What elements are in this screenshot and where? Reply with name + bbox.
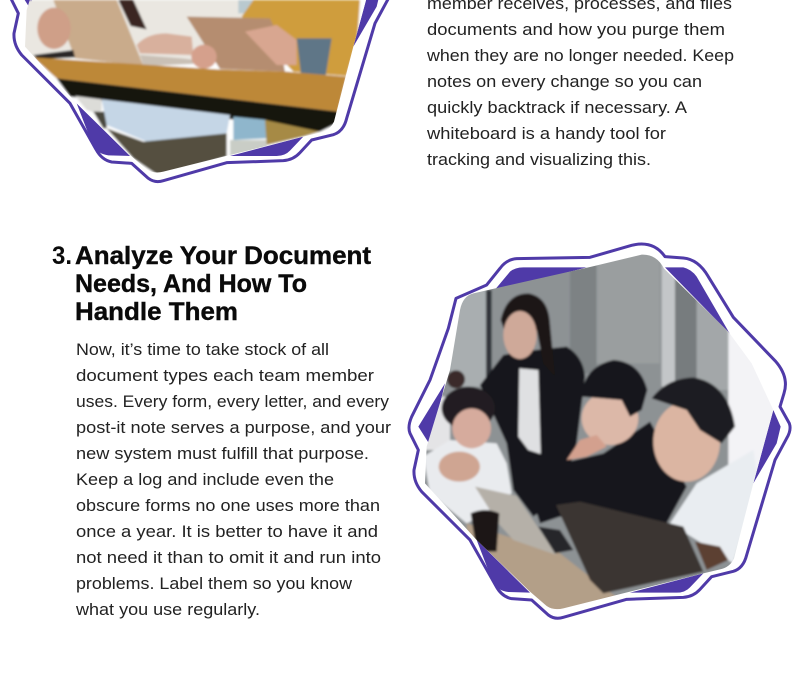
photo frame: team at table with laptop and tablet [9, 0, 390, 182]
heading: step 3: Needs, And How To [75, 270, 307, 298]
photo frame: four colleagues around laptops [409, 244, 790, 618]
middle man [532, 422, 687, 523]
text block: step 2 continued: whiteboard is a handy tool for [426, 124, 666, 143]
table and laptops [466, 524, 615, 609]
photo [420, 250, 780, 613]
text block: step 3 body: new system must fulfill that purpose. [76, 444, 369, 463]
text block: step 3 body: what you use regularly. [75, 600, 260, 619]
text block: step 3 body: not need it than to omit it and run into [76, 548, 381, 567]
outline ring [9, 0, 390, 182]
photo [20, 0, 367, 180]
text block: step 3 body: problems. Label them so you know [76, 574, 353, 593]
purple accents [18, 0, 381, 156]
outline ring [409, 244, 790, 618]
text block: step 2 continued: quickly backtrack if necessary. A [427, 98, 688, 117]
text block: step 2 continued: documents and how you purge them [427, 20, 725, 39]
text block: step 2 continued: tracking and visualizing this. [427, 150, 651, 169]
text block: step 2 continued: notes on every change so you can [427, 72, 702, 91]
heading: step 3 [52, 242, 372, 326]
text block: step 3 body [75, 340, 391, 619]
seated woman [423, 440, 512, 523]
text block: step 3 body: document types each team member [76, 366, 374, 385]
text block: step 2 continued [426, 0, 734, 169]
right man [670, 450, 758, 563]
text block: step 2 continued: when they are no longer needed. Keep [426, 46, 734, 65]
text block: step 3 body: Now, it’s time to take stock of all [76, 340, 329, 359]
text block: step 3 body: Keep a log and include even the [76, 470, 334, 489]
purple accents [418, 267, 781, 593]
heading: step 3: Handle Them [75, 298, 238, 326]
text block: step 3 body: uses. Every form, every letter, and every [76, 392, 390, 411]
heading: step 3: 3. [52, 242, 72, 270]
standing woman [480, 347, 585, 517]
text block: step 3 body: once a year. It is better to have it and [76, 522, 378, 541]
text block: step 3 body: obscure forms no one uses more than [76, 496, 380, 515]
text block: step 3 body: post-it note serves a purpose, and your [76, 418, 391, 437]
heading: step 3: Analyze Your Document [75, 242, 372, 270]
